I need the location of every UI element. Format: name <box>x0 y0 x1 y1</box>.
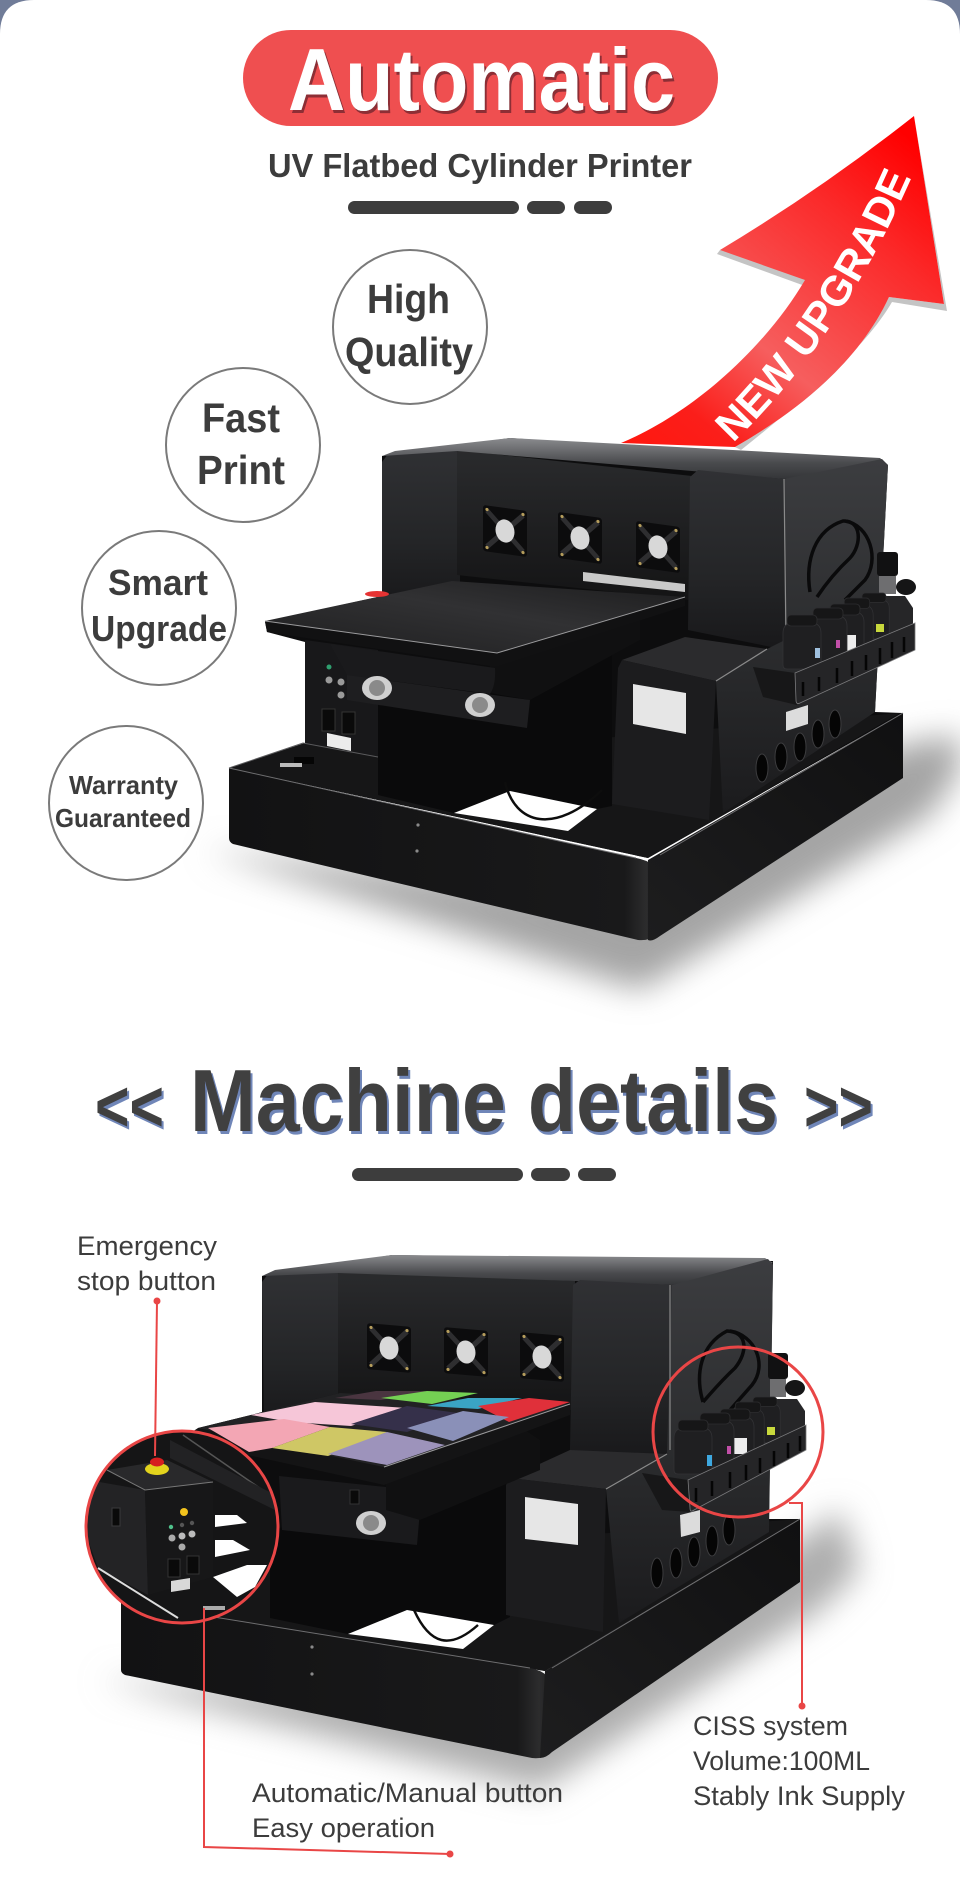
lower block front <box>612 660 716 820</box>
underside rail <box>490 600 640 700</box>
left tower <box>382 448 460 605</box>
inner cavity <box>378 655 612 813</box>
rear recess <box>338 1271 575 1410</box>
arrow: new upgrade: NEW UPGRADE <box>714 168 911 442</box>
base edges <box>229 713 903 858</box>
label: CISS system: CISS system <box>693 1711 848 1741</box>
divider bars top <box>348 201 612 214</box>
lower block edge <box>716 479 786 681</box>
divider bars lower <box>352 1168 616 1181</box>
badge: High Quality: High <box>367 276 450 322</box>
bottle 3 <box>716 1409 754 1463</box>
badge: Fast Print: Print <box>197 447 285 493</box>
ink cable loop <box>809 521 872 600</box>
title: Automatic pill: Automatic <box>288 30 675 129</box>
fan 3 <box>636 521 680 573</box>
badge: Smart Upgrade: Smart <box>108 562 208 603</box>
knob 1 <box>362 676 392 700</box>
white opening in base <box>454 791 597 831</box>
callout line: auto/manual button <box>204 1608 454 1858</box>
lower block top <box>622 637 767 681</box>
lower block front <box>506 1478 606 1632</box>
label: emergency stop button <box>77 1231 218 1296</box>
floor shadow <box>100 1510 860 1790</box>
section heading: Machine details: >> <box>804 1067 873 1147</box>
magnifier: control panel <box>86 1430 279 1624</box>
section heading: Machine details: << <box>95 1067 164 1147</box>
knob <box>356 1511 386 1535</box>
power cable <box>505 782 602 819</box>
printer photo: top <box>205 438 960 990</box>
switch on carriage <box>350 1490 359 1504</box>
bottle 4 <box>841 598 873 649</box>
white opening in base <box>348 1610 494 1649</box>
lower block edge <box>606 1285 670 1489</box>
label: automatic/manual button: Easy operation <box>252 1813 435 1843</box>
badge: Warranty Guaranteed <box>49 726 203 880</box>
right side wall <box>606 1259 773 1623</box>
label: CISS system <box>693 1711 906 1811</box>
side port holes <box>756 710 841 782</box>
badge: Fast Print: Fast <box>202 395 280 441</box>
platen top <box>265 581 685 653</box>
platen edge highlight <box>265 597 685 653</box>
callout line: emergency stop <box>154 1298 160 1456</box>
label: emergency stop button: stop button <box>77 1266 216 1296</box>
ink cable loop <box>700 1331 759 1410</box>
right side wall <box>716 459 888 813</box>
label: automatic/manual button <box>252 1778 563 1843</box>
power cable <box>414 1610 478 1641</box>
carriage <box>279 1476 420 1545</box>
ink box <box>774 1380 805 1445</box>
fan 3 <box>520 1332 564 1382</box>
label: CISS system: Volume:100ML <box>693 1746 870 1776</box>
bottle 2 <box>696 1413 734 1467</box>
top face <box>382 438 888 479</box>
base right <box>540 1519 800 1758</box>
base front <box>121 1602 552 1758</box>
label: CISS system: Stably Ink Supply <box>693 1781 906 1811</box>
badge: Warranty Guaranteed: Guaranteed <box>55 803 191 833</box>
carriage lower <box>347 675 530 728</box>
fan 2 <box>444 1327 488 1377</box>
badge: High Quality: Quality <box>345 329 473 375</box>
base top face <box>229 713 900 858</box>
dark silhouette backing <box>229 438 903 858</box>
base screws <box>310 1645 314 1676</box>
inner cavity <box>270 1480 510 1634</box>
badge: High Quality <box>333 250 487 404</box>
side sticker <box>680 1510 700 1537</box>
label: automatic/manual button: Automatic/Manual button <box>252 1778 563 1808</box>
ink rack <box>753 623 915 705</box>
base edges <box>121 1519 800 1668</box>
bottle 5 <box>859 593 889 639</box>
subtitle: UV Flatbed Cylinder Printer <box>268 147 692 184</box>
magnifier: ink system <box>653 1347 823 1517</box>
badge: Fast Print <box>166 368 320 522</box>
badge: Warranty Guaranteed: Warranty <box>69 770 179 800</box>
left column under platen <box>305 640 378 757</box>
warning sticker <box>633 684 686 734</box>
arrow: new upgrade <box>621 116 947 450</box>
carriage upper <box>330 644 495 694</box>
underside rail <box>386 1420 540 1520</box>
callout line: CISS <box>789 1503 806 1710</box>
clear reservoir bottle <box>768 1353 788 1397</box>
side sticker <box>786 705 808 731</box>
base top left edge <box>229 743 378 768</box>
ink box <box>884 579 916 640</box>
top face <box>262 1255 773 1285</box>
rear recess <box>457 450 692 600</box>
base switch <box>280 757 314 767</box>
base top face <box>121 1519 800 1671</box>
control buttons <box>326 664 344 698</box>
platen edge highlight <box>384 1404 570 1467</box>
rocker switches <box>322 709 355 734</box>
lower block top <box>509 1450 667 1489</box>
bottle 5 <box>750 1397 780 1443</box>
printer photo: details <box>100 1255 860 1790</box>
right tower front <box>570 1280 672 1460</box>
bottle 4 <box>732 1402 764 1453</box>
fan 1 <box>367 1323 411 1373</box>
section heading: Machine details: Machine details <box>190 1051 778 1150</box>
switch label <box>327 733 351 751</box>
clear reservoir bottle <box>877 552 898 594</box>
dark silhouette backing <box>121 1255 800 1671</box>
red tab <box>365 591 389 597</box>
fan 1 <box>483 505 527 557</box>
fan 2 <box>558 512 602 564</box>
knob 2 <box>465 693 495 717</box>
base screws <box>415 823 420 853</box>
badge: Smart Upgrade: Upgrade <box>91 608 227 649</box>
ink rack <box>642 1425 806 1512</box>
bottle 2 <box>809 608 847 662</box>
bottle 1 <box>674 1420 712 1474</box>
platen top <box>198 1393 570 1467</box>
label: emergency stop button: Emergency <box>77 1231 218 1261</box>
phone cases <box>208 1391 570 1465</box>
badge: Smart Upgrade <box>82 531 236 685</box>
left tower <box>262 1272 340 1425</box>
side port holes <box>651 1515 735 1588</box>
floor shadow <box>205 735 960 990</box>
base front <box>229 768 659 940</box>
bottle 3 <box>826 604 864 658</box>
base right <box>648 713 903 940</box>
platen <box>180 1393 570 1485</box>
bottle 1 <box>783 615 821 669</box>
right tower front <box>688 470 786 650</box>
platen thickness <box>265 597 685 667</box>
warning sticker <box>525 1497 578 1545</box>
silver rail <box>583 572 685 592</box>
